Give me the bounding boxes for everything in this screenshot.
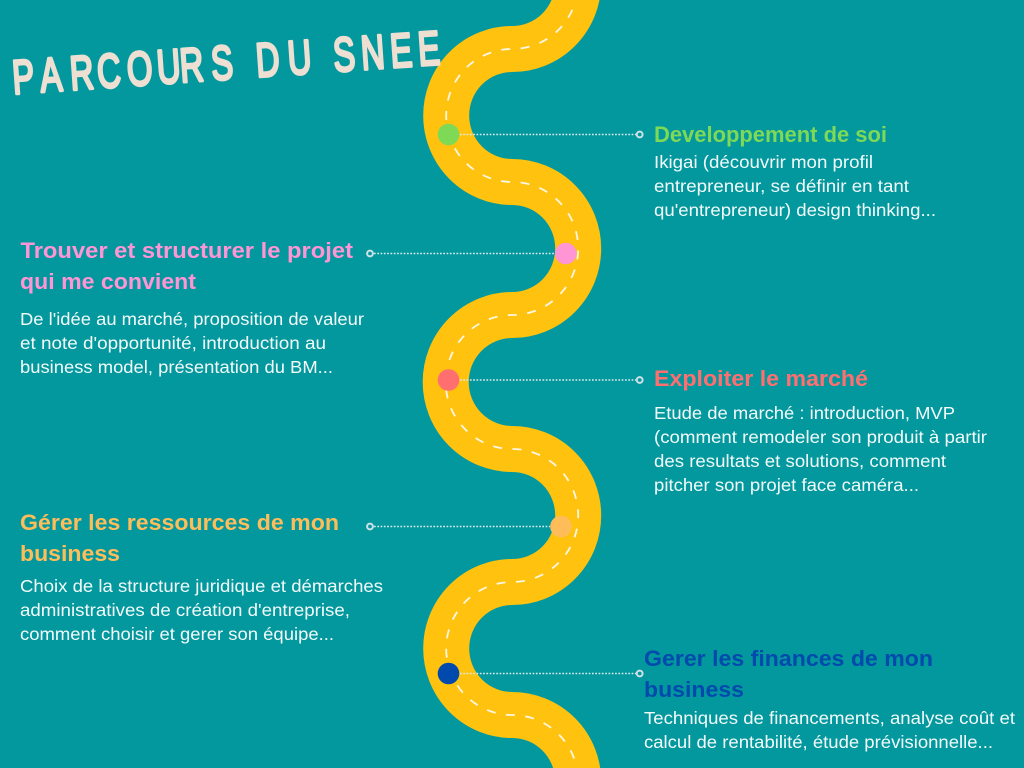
block: developpement de soi: entrepreneur, se définir en tant <box>654 176 909 196</box>
block: gérer les finances: Techniques de financements, analyse coût et <box>644 708 1015 728</box>
block: exploiter le marché: des resultats et solutions, comment <box>654 451 946 471</box>
block: developpement de soi: Developpement de soi <box>654 122 887 147</box>
block: gérer les finances: Gerer les finances de mon <box>644 646 933 671</box>
block: exploiter le marché: (comment remodeler son produit à partir <box>654 427 987 447</box>
block: exploiter le marché: pitcher son projet face caméra... <box>654 475 919 495</box>
title: PARCOURS DU SNEE <box>10 21 442 104</box>
block: gérer les ressources: Gérer les ressources de mon <box>20 510 339 535</box>
block: gérer les finances: business <box>644 677 744 702</box>
marker: pink <box>555 243 576 264</box>
marker: coral <box>438 369 459 391</box>
road <box>446 0 578 768</box>
block: gérer les ressources: comment choisir et gerer son équipe... <box>20 624 334 644</box>
connector: developpement de soi <box>460 132 643 137</box>
block: gérer les finances <box>644 646 1015 752</box>
connector: gérer les finances <box>460 671 643 676</box>
block: trouver et structurer le projet: et note d'opportunité, introduction au <box>20 333 326 353</box>
block: gérer les ressources <box>20 510 383 644</box>
block: developpement de soi: qu'entrepreneur) design thinking... <box>654 200 936 220</box>
block: trouver et structurer le projet: business model, présentation du BM... <box>20 357 333 377</box>
block: exploiter le marché <box>654 366 987 495</box>
connector: gérer les ressources <box>367 524 550 529</box>
block: exploiter le marché: Etude de marché : introduction, MVP <box>654 403 955 423</box>
block: gérer les ressources: business <box>20 541 120 566</box>
connector: exploiter le marché <box>460 377 643 383</box>
block: developpement de soi <box>654 122 936 220</box>
block: exploiter le marché: Exploiter le marché <box>654 366 868 391</box>
marker: green <box>438 124 459 145</box>
block: developpement de soi: Ikigai (découvrir mon profil <box>654 152 873 172</box>
marker: orange <box>550 516 572 537</box>
block: gérer les finances: calcul de rentabilité, étude prévisionnelle... <box>644 732 993 752</box>
block: trouver et structurer le projet: De l'idée au marché, proposition de valeur <box>20 309 364 329</box>
marker: blue <box>438 663 459 684</box>
block: trouver et structurer le projet: qui me convient <box>20 269 197 294</box>
block: trouver et structurer le projet: Trouver et structurer le projet <box>20 238 354 263</box>
block: trouver et structurer le projet <box>20 238 364 377</box>
connector: trouver le projet <box>367 251 555 256</box>
block: gérer les ressources: Choix de la structure juridique et démarches <box>20 576 383 596</box>
block: gérer les ressources: administratives de création d'entreprise, <box>20 600 350 620</box>
